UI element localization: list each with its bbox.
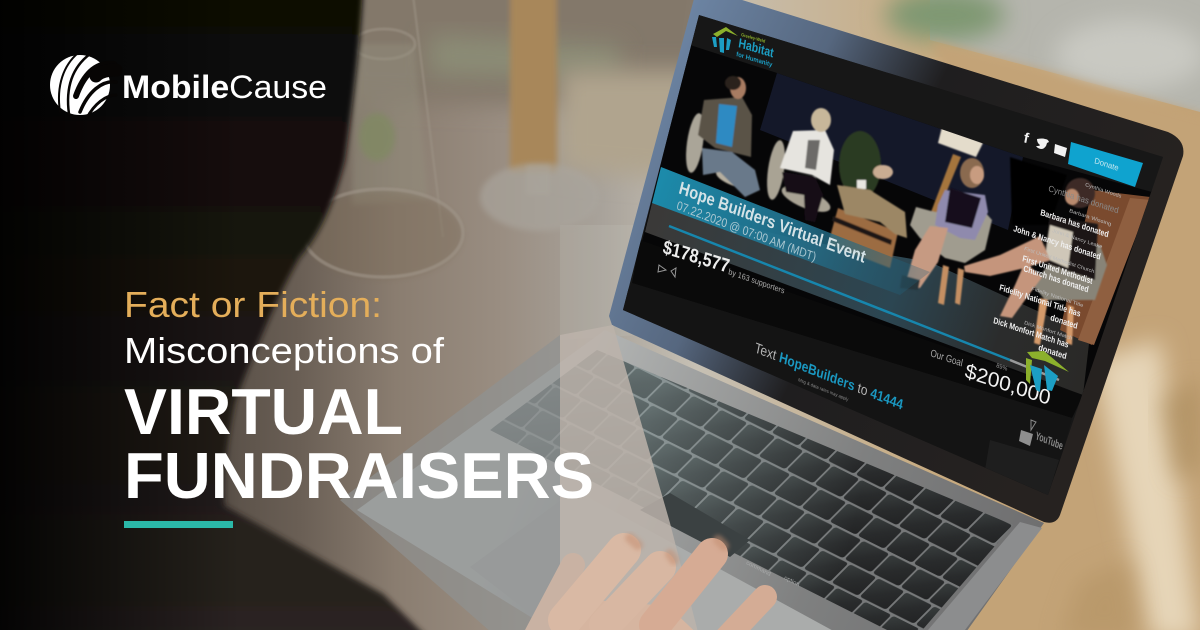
donor feed: donated — [1038, 342, 1068, 361]
woman in white jacket — [764, 108, 834, 222]
player controls — [658, 265, 676, 277]
headline: Fact or Fiction: Fact or Fiction: — [124, 284, 382, 325]
donor feed: donated — [1050, 312, 1079, 331]
screen page background — [623, 15, 1163, 495]
glass base — [480, 163, 600, 231]
title band — [652, 167, 930, 295]
top header strip — [690, 15, 1163, 192]
amount raised: $178,577 — [661, 237, 731, 278]
blurred glassware in background — [303, 0, 600, 279]
laptop — [357, 0, 1183, 630]
donor feed: Barbara Wissing — [1069, 208, 1112, 228]
key labels: command — [745, 560, 771, 578]
donor feed: John & Nancy has donated — [1013, 223, 1102, 262]
logo globe mark — [50, 53, 116, 118]
spacebar — [640, 493, 750, 557]
supporter count: by 163 supporters — [728, 266, 786, 296]
donor feed: Church has donated — [1023, 263, 1090, 294]
teal accent bar — [124, 521, 233, 528]
organization logo: Habitat: for Humanity — [736, 51, 773, 69]
glass reflection band over laptop — [560, 325, 700, 630]
person silhouette in the foreground — [0, 0, 430, 630]
key labels: option — [783, 575, 800, 588]
palm — [535, 598, 725, 630]
man on chair — [683, 76, 760, 197]
woman on the right — [964, 157, 1107, 345]
Habitat watermark icon — [1026, 351, 1069, 392]
donor feed: First United Methodist Church — [1024, 246, 1095, 275]
donate button — [1068, 142, 1143, 187]
black lower panel — [632, 240, 1083, 418]
fingertip shading — [630, 538, 724, 560]
hand on trackpad — [528, 538, 765, 630]
donor feed: Cynthia has donated — [1048, 183, 1120, 215]
key labels — [745, 560, 800, 588]
donor feed: Cynthia Woods — [1085, 182, 1122, 200]
stage floor — [645, 203, 1090, 395]
trackpad — [470, 490, 850, 630]
headline — [124, 284, 594, 512]
table with barrel and plant — [828, 131, 907, 268]
progress bar — [669, 226, 1059, 380]
logo wordmark: MobileCause — [122, 69, 327, 105]
laptop base deck — [357, 330, 1044, 630]
rates disclaimer: Msg & data rates may apply — [798, 377, 849, 402]
jar ring base — [303, 191, 463, 279]
headline: VIRTUAL: VIRTUAL — [124, 375, 403, 448]
donor feed: Barbara has donated — [1040, 207, 1110, 239]
index finger — [655, 554, 712, 625]
YouTube badge — [1019, 420, 1064, 453]
footer band — [623, 289, 768, 373]
speaker grille edge — [928, 522, 1042, 630]
donor feed: Dick Monfort Match has — [993, 315, 1070, 350]
donor feed: Dick Monfort Match — [1024, 320, 1073, 342]
YouTube badge: YouTube — [1034, 430, 1064, 453]
muted left portion of laptop — [340, 335, 560, 630]
brown wall — [1060, 190, 1150, 345]
laptop lid — [609, 0, 1183, 523]
goal label: Our Goal — [929, 348, 964, 369]
event title: Hope Builders Virtual Event — [677, 178, 868, 267]
percent label: 89% — [996, 362, 1008, 373]
donor feed: John & Nancy Leake — [1052, 228, 1103, 250]
donate button: Donate — [1094, 155, 1120, 173]
pinky finger — [528, 565, 573, 630]
organization logo: Habitat — [712, 27, 775, 69]
woman in purple cardigan — [900, 158, 992, 305]
screen — [610, 15, 1163, 500]
middle finger — [605, 567, 660, 625]
event video — [640, 44, 1160, 395]
social icons: f — [1022, 130, 1030, 147]
event date: 07.22.2020 @ 07:00 AM (MDT) — [675, 199, 818, 264]
goal amount: $200,000 — [963, 360, 1052, 410]
navy stage backdrop — [760, 73, 1023, 230]
keyboard sheen — [490, 350, 1013, 630]
MobileCause logo — [50, 53, 327, 118]
ring finger — [565, 550, 624, 620]
floor lamp — [931, 127, 983, 215]
glass jar — [353, 29, 415, 59]
stage people — [683, 76, 1107, 345]
headline: Misconceptions of: Misconceptions of — [124, 330, 445, 371]
keyboard — [490, 350, 1013, 630]
donor feed: Fidelity National Title — [1031, 286, 1084, 309]
text-to-give call to action: Text HopeBuilders to 41444 — [753, 341, 905, 414]
organization logo: Habitat: Greeley-Weld — [741, 32, 766, 44]
thumb — [715, 597, 765, 630]
headline: FUNDRAISERS: FUNDRAISERS — [124, 439, 594, 512]
donor feed: Fidelity National Title has — [999, 282, 1082, 319]
social icons — [1022, 130, 1067, 157]
candlestick stem — [510, 0, 557, 172]
donor feed — [993, 182, 1122, 361]
pale reflection above the laptop hinge — [560, 225, 660, 340]
donor feed: First United Methodist — [1022, 253, 1094, 286]
organization logo: Habitat: Habitat — [738, 35, 775, 61]
